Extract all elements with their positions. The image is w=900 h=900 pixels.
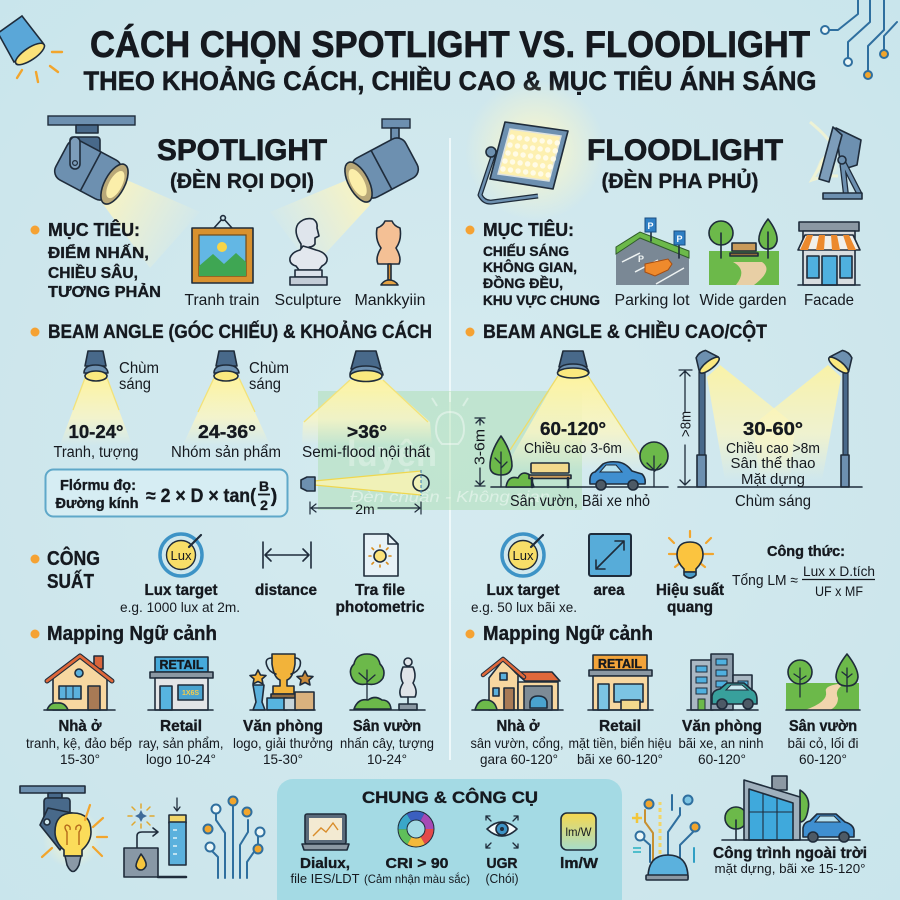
goal text: MỤC TIÊU:	[48, 219, 140, 240]
context: retail	[138, 657, 224, 767]
formula: total lumen: Công thức:	[767, 544, 845, 560]
label: lux target	[120, 582, 240, 615]
context: garden path: bãi cỏ, lối đi	[788, 735, 858, 751]
icon: flask and tube	[124, 798, 186, 877]
heading: mapping: Mapping Ngữ cảnh	[47, 623, 217, 645]
panel: common tools	[277, 779, 622, 900]
formula box: ≈ 2 × D × tan(	[146, 486, 257, 507]
panel: floodlight beam angle	[466, 321, 862, 510]
label: sculpture: Sculpture	[274, 292, 342, 309]
panel: spotlight goals	[30, 216, 426, 309]
pole beam diagram: 30-60°	[743, 418, 803, 439]
goal text	[30, 219, 161, 301]
formula: total lumen	[732, 544, 875, 599]
context: home	[26, 656, 132, 767]
tool: cri	[364, 816, 470, 886]
beam 24-36	[171, 351, 289, 461]
formula: total lumen: Tổng LM ≈	[732, 573, 798, 589]
garden beam diagram: 60-120°	[540, 418, 606, 439]
context: garden path: Sân vườn	[789, 718, 857, 735]
label: hieu suat: Hiệu suất	[656, 582, 725, 599]
context: retail: ray, sản phẩm,	[138, 735, 224, 751]
label: lux target: Lux target	[144, 582, 218, 599]
icon: sculpture bust	[290, 219, 327, 285]
label: photometric: Tra file	[355, 582, 405, 599]
formula: total lumen: UF x MF	[815, 583, 863, 599]
label: distance: distance	[255, 582, 317, 599]
context: garden path: 60-120°	[799, 751, 847, 767]
panel: bottom left icons	[20, 786, 264, 878]
icon: distance arrow	[263, 542, 311, 568]
beam over 36: Semi-flood nội thất	[302, 444, 431, 461]
icon: lux target	[502, 534, 544, 576]
icon: lux target: Lux	[512, 549, 534, 563]
icon: circuit tree	[204, 796, 264, 878]
garden beam diagram: Sân vườn, Bãi xe nhỏ	[510, 493, 650, 510]
beam 24-36: sáng	[249, 376, 281, 393]
pole beam diagram: Chiều cao >8m	[726, 440, 820, 457]
label: lux target: Lux target	[486, 582, 560, 599]
icon: bulb	[669, 531, 713, 578]
context: retail: logo 10-24°	[146, 751, 216, 767]
icon: corner lamp top left	[0, 16, 62, 82]
goal text: CHIỀU SÂU,	[48, 263, 138, 282]
panel: floodlight goals	[466, 218, 860, 309]
context: home: Nhà ở	[58, 718, 102, 735]
garden beam diagram: Chiều cao 3-6m	[524, 440, 622, 457]
context: office with car: Văn phòng	[682, 718, 762, 735]
context: retail: Retail	[160, 718, 202, 735]
heading: beam angle: BEAM ANGLE (GÓC CHIẾU) & KHOẢNG CÁCH	[48, 321, 432, 343]
label: outdoor works: mặt dựng, bãi xe 15-120°	[714, 861, 866, 876]
panel: spotlight power	[30, 534, 425, 616]
context: home: tranh, kệ, đảo bếp	[26, 735, 132, 751]
pole beam diagram: Mặt dựng	[741, 471, 805, 488]
tool: lumens per watt	[560, 813, 599, 872]
tool: lumens per watt: lm/W	[566, 825, 592, 839]
formula box: )	[271, 486, 277, 507]
tool: dialux: Dialux,	[300, 855, 350, 872]
panel: spotlight mapping	[26, 623, 434, 767]
heading: mapping: Mapping Ngữ cảnh	[483, 623, 653, 645]
label: mannequin: Mankkyiin	[354, 292, 426, 309]
heading: beam angle height: BEAM ANGLE & CHIỀU CAO/CỘT	[483, 321, 767, 343]
context: garden: 10-24°	[367, 751, 407, 767]
watermark: Đèn chuẩn - Không gian	[350, 488, 550, 506]
icon: ceiling spotlight right	[270, 119, 422, 268]
tool: ugr: (Chói)	[486, 871, 518, 886]
context: garden: nhấn cây, tượng	[340, 735, 434, 751]
panel: spotlight header	[48, 116, 422, 268]
goal text: CHIẾU SÁNG	[483, 243, 569, 259]
formula box: B	[259, 478, 269, 494]
panel: bottom right icons	[632, 776, 867, 880]
label: hieu suat: quang	[667, 599, 713, 616]
garden beam diagram	[472, 351, 668, 510]
beam 10-24: 10-24°	[68, 421, 124, 442]
title: THEO KHOẢNG CÁCH, CHIỀU CAO & MỤC TIÊU ÁNH SÁNG	[84, 66, 816, 96]
tool: cri: (Cảm nhận màu sắc)	[364, 871, 470, 886]
icon: floodlight side view	[810, 122, 862, 199]
icon: parking lot	[616, 218, 689, 285]
goal text: ĐIỂM NHẤN,	[48, 243, 149, 262]
icon: parking lot: P	[647, 221, 654, 231]
beam 10-24: Tranh, tượng	[54, 444, 138, 461]
icon: track spotlight left	[48, 116, 200, 268]
context: retail: 1X6S	[182, 690, 199, 697]
context: office	[233, 654, 333, 767]
panel: floodlight mapping	[466, 623, 860, 767]
heading: cong suat	[30, 546, 100, 593]
title	[84, 24, 816, 96]
icon: lux target: Lux	[170, 549, 192, 563]
icon: corner circuit top right	[821, 0, 897, 79]
label: photometric: photometric	[336, 599, 425, 616]
context: home with garage: gara 60-120°	[480, 751, 558, 767]
icon: area	[589, 534, 631, 576]
beam 24-36: Nhóm sản phẩm	[171, 444, 281, 461]
context: home with garage: Nhà ở	[496, 718, 540, 735]
context: retail storefront: mặt tiền, biển hiệu	[568, 735, 672, 751]
panel: floodlight power	[471, 531, 875, 616]
heading: floodlight: FLOODLIGHT	[587, 134, 783, 167]
tool: cri: CRI > 90	[386, 855, 448, 872]
pole beam diagram: Sân thể thao	[730, 455, 816, 472]
beam 24-36: Chùm	[249, 360, 289, 377]
heading: common tools: CHUNG & CÔNG CỤ	[362, 788, 538, 807]
goal text: KHU VỰC CHUNG	[483, 292, 600, 308]
label: lux target: e.g. 50 lux bãi xe.	[471, 599, 577, 615]
formula box	[46, 470, 288, 516]
icon: framed painting	[192, 216, 253, 283]
context: garden	[340, 654, 434, 767]
context: retail storefront	[568, 655, 672, 767]
label: photometric	[336, 582, 425, 616]
icon: shop facade	[798, 222, 860, 285]
icon: lux target	[160, 534, 202, 576]
context: garden path	[786, 654, 860, 767]
label: wide garden: Wide garden	[700, 292, 786, 309]
beam 10-24: sáng	[119, 376, 151, 393]
goal text: ĐỒNG ĐỀU,	[483, 274, 563, 291]
beam 10-24	[54, 351, 159, 461]
distance diagram	[301, 470, 429, 517]
beam over 36: >36°	[347, 421, 387, 442]
panel: floodlight header	[465, 80, 862, 220]
icon: parking lot: P	[638, 254, 644, 264]
label: lux target	[471, 582, 577, 615]
context: home: 15-30°	[60, 751, 100, 767]
context: retail storefront: bãi xe 60-120°	[577, 751, 663, 767]
beam over 36	[302, 351, 432, 461]
formula box: Đường kính	[56, 496, 138, 512]
context: office with car: 60-120°	[698, 751, 746, 767]
goal text: MỤC TIÊU:	[483, 219, 574, 240]
formula box: Flórmu đọ:	[60, 478, 136, 494]
beam 10-24: Chùm	[119, 360, 159, 377]
goal text: TƯƠNG PHẢN	[48, 282, 161, 301]
label: lux target: e.g. 1000 lux at 2m.	[120, 599, 240, 615]
pole beam diagram: >8m	[678, 411, 694, 437]
pole beam diagram	[678, 346, 862, 510]
icon: parking lot: P	[676, 234, 683, 244]
title: CÁCH CHỌN SPOTLIGHT VS. FLOODLIGHT	[90, 24, 810, 65]
icon: photometric file	[364, 534, 398, 576]
goal text	[466, 219, 600, 308]
tool: ugr	[486, 816, 518, 886]
context: retail storefront: RETAIL	[598, 657, 642, 671]
icon: building and car	[722, 776, 860, 842]
watermark	[318, 391, 582, 510]
heading: spotlight: SPOTLIGHT	[157, 134, 327, 167]
context: office with car: bãi xe, an ninh	[678, 735, 764, 751]
icon: circuit dome	[632, 795, 700, 880]
icon: dress form	[376, 221, 400, 285]
context: home with garage	[470, 659, 564, 767]
formula box: 2	[260, 497, 268, 513]
label: parking lot: Parking lot	[614, 292, 690, 309]
subheading: spotlight: (ĐÈN RỌI DỌI)	[170, 170, 314, 193]
label: painting: Tranh train	[184, 292, 260, 309]
context: office with car	[678, 654, 764, 767]
watermark: luyện	[347, 433, 437, 474]
context: retail: RETAIL	[160, 658, 204, 672]
tool: dialux: file IES/LDT	[290, 871, 360, 886]
distance diagram: 2m	[355, 501, 375, 517]
label: area: area	[594, 582, 625, 599]
icon: wide garden	[709, 219, 779, 285]
label: facade: Facade	[804, 292, 854, 309]
heading: cong suat: SUẤT	[47, 570, 94, 593]
label: outdoor works: Công trình ngoài trời	[713, 845, 867, 862]
formula: total lumen: Lux x D.tích	[803, 563, 875, 579]
label: hieu suat	[656, 582, 725, 616]
garden beam diagram: 3-6m	[472, 429, 488, 465]
context: garden: Sân vườn	[353, 718, 421, 735]
icon: floodlight panel	[465, 80, 605, 220]
label: outdoor works	[713, 845, 867, 876]
context: retail storefront: Retail	[599, 718, 641, 735]
panel: spotlight beam angle	[30, 321, 432, 517]
tool: ugr: UGR	[486, 855, 518, 872]
goal text: KHÔNG GIAN,	[483, 258, 577, 275]
subheading: floodlight: (ĐÈN PHA PHỦ)	[602, 169, 758, 193]
context: home with garage: sân vườn, cổng,	[470, 735, 564, 751]
heading: cong suat: CÔNG	[47, 546, 100, 570]
tool: lumens per watt: lm/W	[560, 855, 599, 872]
context: office: logo, giải thưởng	[233, 735, 333, 751]
pole beam diagram: Chùm sáng	[735, 493, 811, 510]
context: office: Văn phòng	[243, 718, 323, 735]
tool: dialux	[290, 814, 360, 886]
context: office: 15-30°	[263, 751, 303, 767]
beam 24-36: 24-36°	[198, 421, 256, 442]
icon: track lamp with bulb	[20, 786, 107, 872]
